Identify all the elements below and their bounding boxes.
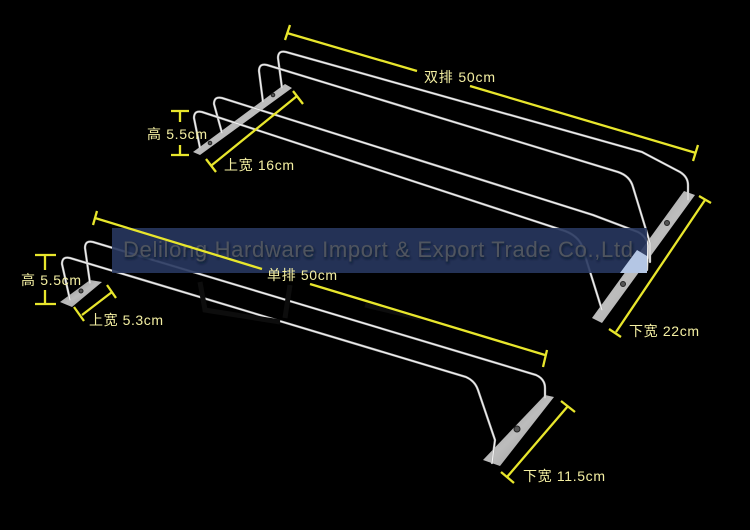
- wire back: [85, 242, 545, 398]
- dimension: double row lower width: [609, 196, 711, 337]
- front lower mounting bracket: [592, 191, 695, 323]
- wire 1: [278, 52, 688, 200]
- panel: single row rack: [60, 242, 554, 466]
- lower mounting bracket: [483, 395, 554, 466]
- label: double row upper width: 上宽 16cm: [224, 157, 294, 173]
- label: double row lower width: 下宽 22cm: [629, 323, 699, 339]
- faint ghost reflection: [200, 282, 420, 322]
- rear upper mounting bracket: [193, 84, 292, 155]
- upper mounting bracket: [60, 280, 102, 307]
- label: double row height: 高 5.5cm: [147, 126, 207, 142]
- bracket screw holes: [208, 93, 669, 286]
- label: single row upper width: 上宽 5.3cm: [89, 312, 163, 328]
- dimension: single row length: [93, 211, 547, 367]
- dimension: double row upper width: [206, 91, 303, 172]
- label: double row length: 双排 50cm: [424, 69, 495, 85]
- dimension: double row height: [171, 111, 189, 155]
- dimension: single row height: [35, 255, 56, 304]
- bracket seen through banner: [620, 250, 647, 273]
- watermark banner: [112, 228, 647, 273]
- dimension: single row lower width: [501, 401, 575, 483]
- label: single row length: 单排 50cm: [267, 267, 337, 283]
- watermark text: Delilong Hardware Import & Export Trade Co.,Ltd: [123, 237, 633, 262]
- dimension: single row upper width: [74, 285, 116, 321]
- panel: double row rack: [193, 52, 695, 323]
- label: single row height: 高 5.5cm: [21, 272, 81, 288]
- label: single row lower width: 下宽 11.5cm: [523, 468, 605, 484]
- bracket screw holes: [79, 289, 520, 432]
- wire 3: [214, 98, 648, 270]
- wire 2: [259, 65, 650, 262]
- wire 4: [194, 112, 602, 310]
- wire front: [62, 258, 495, 463]
- dimension: double row length: [285, 25, 698, 161]
